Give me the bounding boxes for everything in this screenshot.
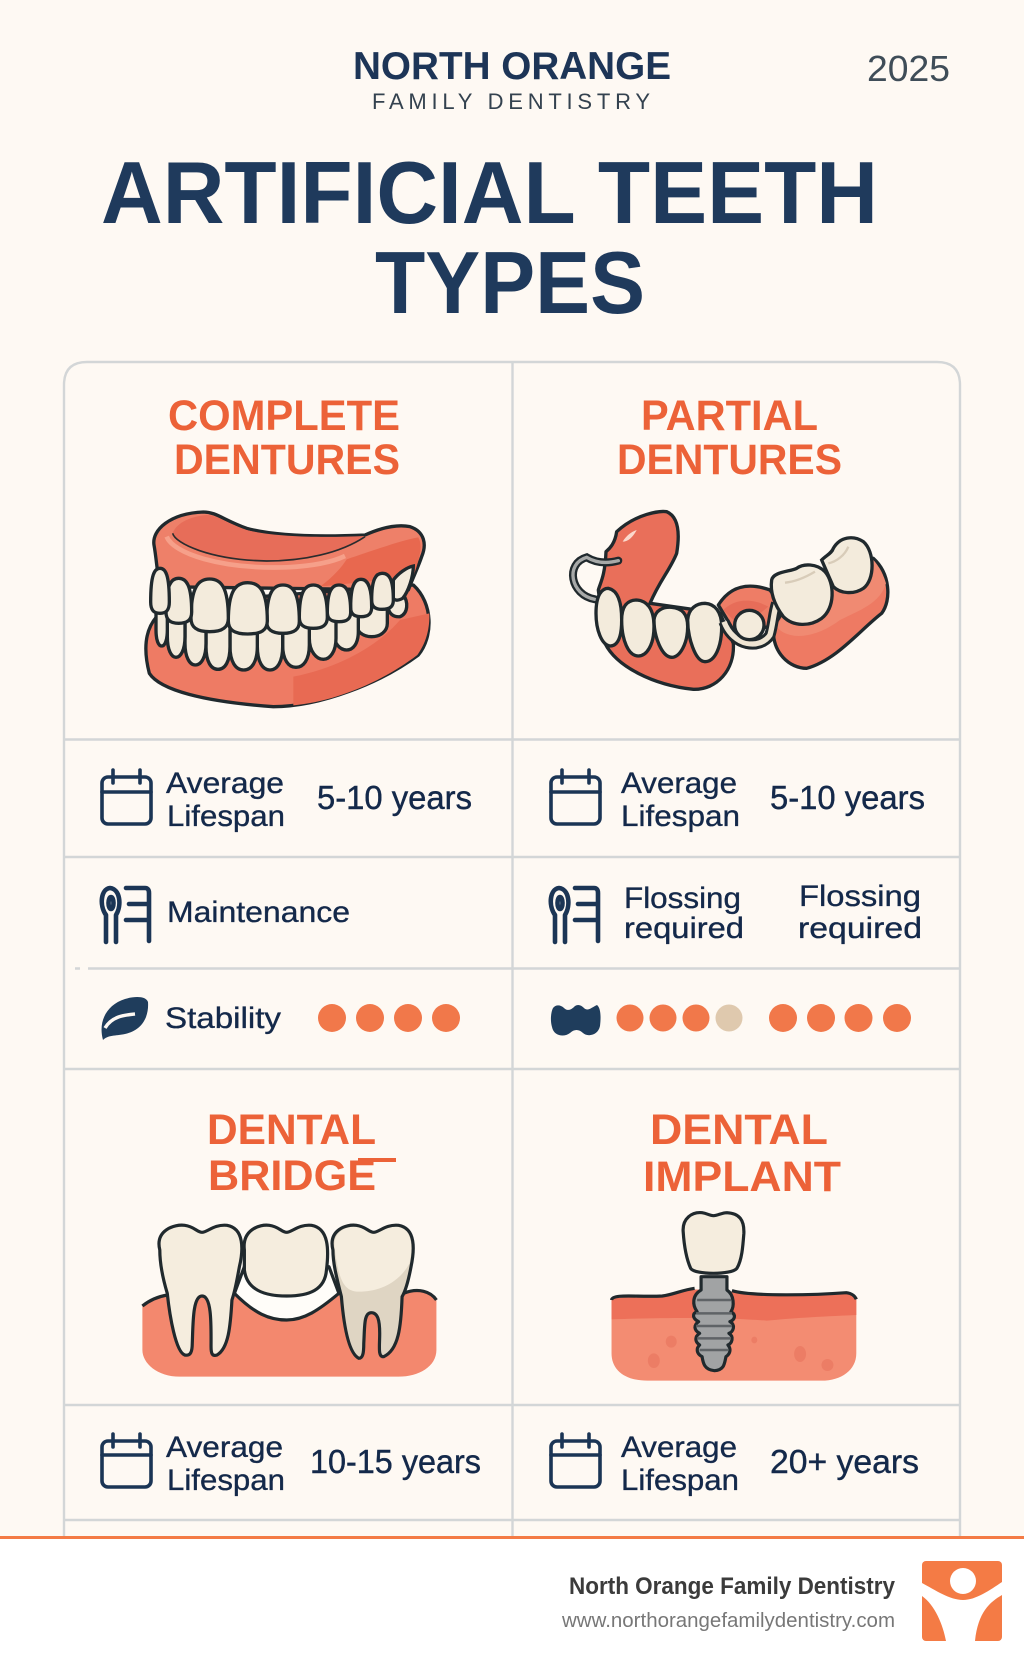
title: TYPES — [375, 233, 645, 332]
icon: leaf — [102, 997, 148, 1040]
footer — [0, 1536, 1024, 1666]
heading: dental implant — [643, 1106, 841, 1201]
heading: complete dentures — [168, 392, 400, 484]
label: flossing required: required — [624, 912, 744, 945]
label: average lifespan — [621, 767, 740, 833]
row: average lifespan — [551, 1431, 919, 1497]
value: 5-10 years: 5-10 years — [770, 779, 925, 816]
row: average lifespan — [551, 767, 925, 833]
row: maintenance — [551, 880, 922, 945]
label: average lifespan — [166, 1431, 285, 1497]
title — [101, 143, 878, 332]
footer website: www.northorangefamilydentistry.com — [561, 1610, 895, 1632]
row: average lifespan — [102, 1431, 481, 1497]
heading: dental bridge: BRIDGE — [208, 1152, 376, 1200]
icon: toothbrush and comb — [102, 888, 149, 942]
footer practice name: North Orange Family Dentistry — [569, 1573, 896, 1600]
title: ARTIFICIAL TEETH — [101, 143, 878, 242]
icon: calendar — [102, 770, 151, 824]
heading: dental implant: DENTAL — [650, 1106, 828, 1154]
year: 2025 — [867, 48, 950, 89]
label: average lifespan: Average — [166, 1431, 283, 1464]
illustration: dental bridge — [142, 1225, 436, 1377]
illustration: complete dentures — [146, 512, 429, 707]
logo: North Orange Family Dentistry wordmark: NORTH ORANGE — [353, 45, 671, 88]
comparison table grid — [64, 362, 960, 1537]
icon: toothbrush and comb — [551, 888, 598, 942]
panel: dental implant — [551, 1106, 919, 1497]
logo: North Orange Family Dentistry wordmark — [353, 45, 671, 114]
heading: complete dentures: COMPLETE — [168, 392, 400, 440]
label: average lifespan: Lifespan — [621, 1464, 739, 1497]
label: average lifespan — [621, 1431, 739, 1497]
row: stability — [551, 1004, 911, 1035]
value: 5-10 years: 5-10 years — [317, 779, 472, 816]
rating: 3 of 4 dots — [616, 1004, 742, 1032]
row: average lifespan — [102, 767, 472, 833]
label: flossing required — [624, 882, 744, 945]
label: average lifespan: Average — [621, 767, 737, 800]
heading: dental implant: IMPLANT — [643, 1153, 841, 1201]
heading: partial dentures — [617, 392, 842, 484]
panel: complete dentures — [102, 392, 472, 1040]
value: 20+ years: 20+ years — [770, 1443, 919, 1480]
heading: partial dentures: DENTURES — [617, 436, 842, 484]
rating: 4 of 4 dots — [318, 1004, 460, 1032]
heading: dental bridge: DENTAL — [207, 1106, 376, 1154]
label: average lifespan: Average — [166, 767, 284, 800]
value: flossing required: required — [798, 912, 922, 945]
icon: wavy blob — [551, 1005, 601, 1035]
icon: calendar — [551, 1434, 600, 1487]
heading: partial dentures: PARTIAL — [641, 392, 818, 440]
panel: dental bridge — [102, 1106, 481, 1497]
value: flossing required — [798, 880, 922, 945]
label: average lifespan — [166, 767, 285, 833]
label: stability: Stability — [165, 1002, 281, 1035]
illustration: dental implant — [612, 1213, 856, 1381]
label: average lifespan: Lifespan — [167, 1464, 285, 1497]
value: flossing required: Flossing — [799, 880, 921, 913]
label: average lifespan: Lifespan — [621, 800, 740, 833]
label: average lifespan: Lifespan — [167, 800, 285, 833]
panel: partial dentures — [551, 392, 925, 1035]
label: average lifespan: Average — [621, 1431, 737, 1464]
row: maintenance — [102, 888, 350, 942]
rating: 4 of 4 dots — [769, 1004, 911, 1032]
icon: calendar — [551, 770, 600, 824]
row: stability — [102, 997, 460, 1040]
illustration: partial dentures — [573, 511, 888, 689]
heading: complete dentures: DENTURES — [174, 436, 400, 484]
logo: North Orange Family Dentistry wordmark: FAMILY DENTISTRY — [372, 89, 650, 114]
label: flossing required: Flossing — [624, 882, 741, 915]
label: maintenance: Maintenance — [167, 896, 350, 929]
value: 10-15 years: 10-15 years — [310, 1443, 481, 1480]
heading: dental bridge — [207, 1106, 396, 1200]
icon: footer logo — [922, 1561, 1002, 1641]
icon: calendar — [102, 1434, 151, 1487]
